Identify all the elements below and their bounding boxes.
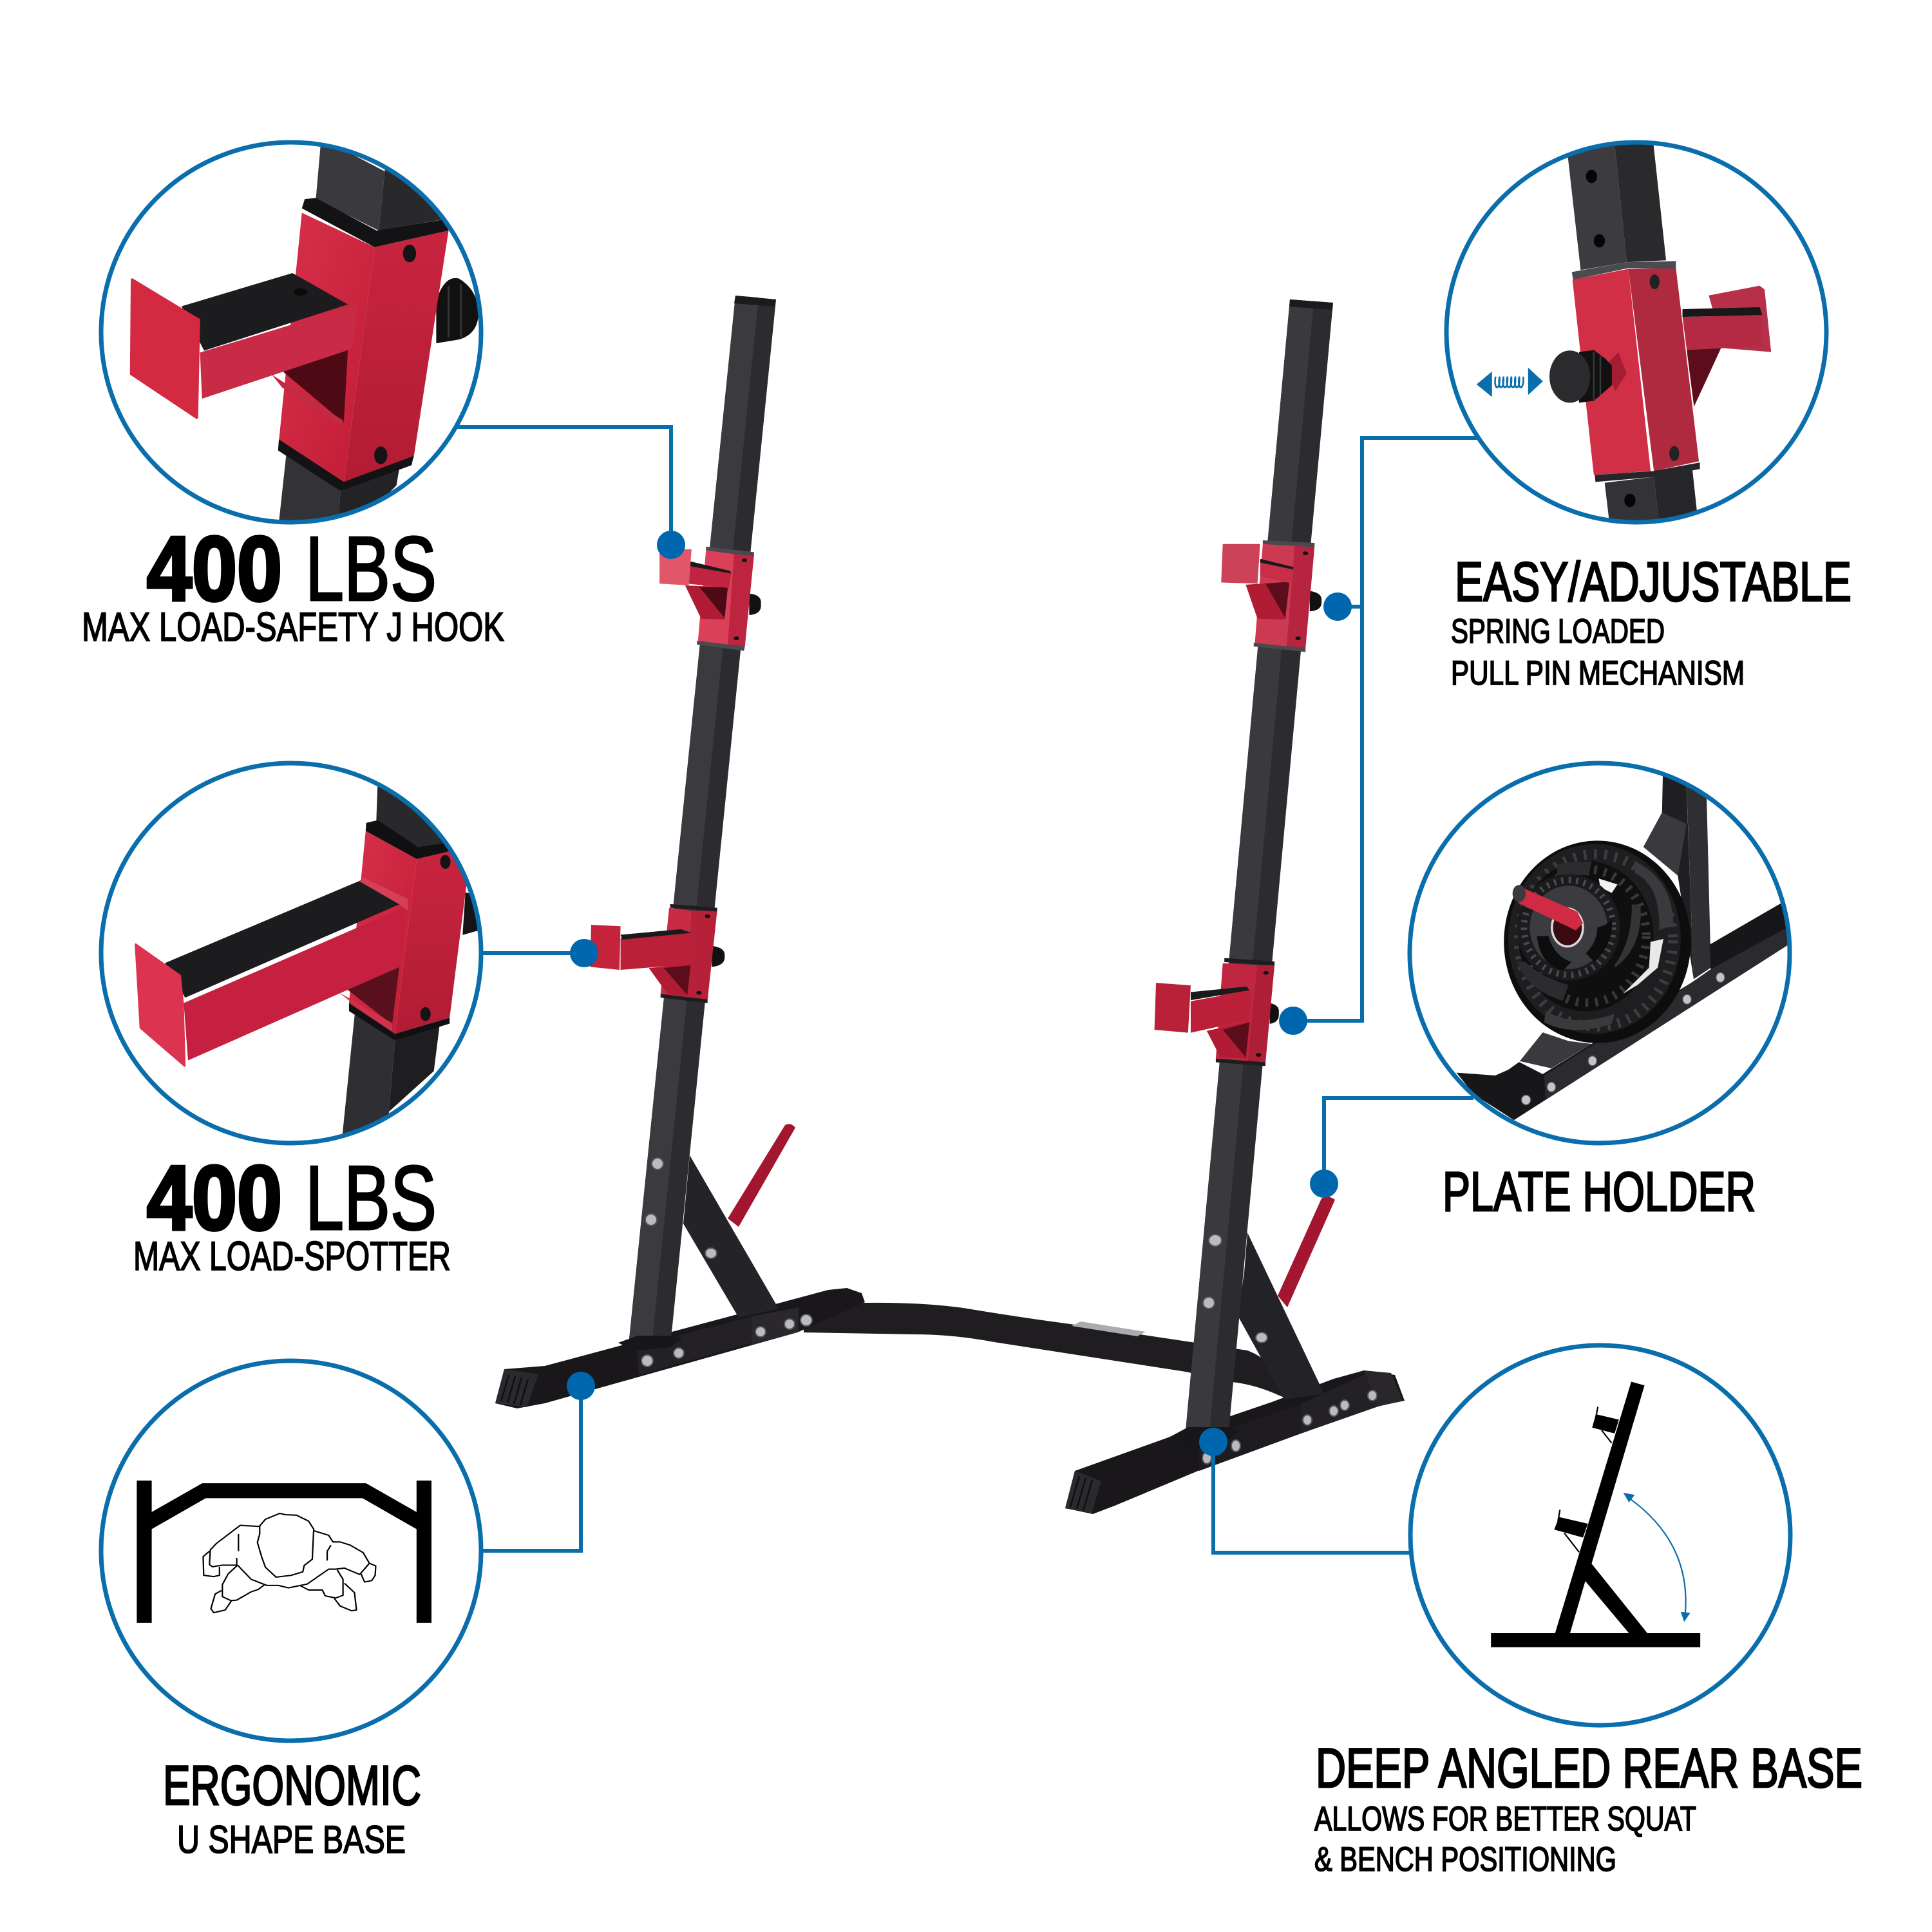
text: spring loaded pull pin mechanism: SPRING LOADED — [1451, 612, 1665, 650]
text: better squat and bench positioning: & BENCH POSITIONING — [1314, 1841, 1616, 1879]
heading: 400 LBS J hook: 400 — [147, 518, 282, 620]
heading: 400 LBS J hook — [147, 518, 437, 620]
panel: pull pin detail — [1446, 139, 1826, 529]
bolts — [1521, 972, 1725, 1105]
heading: 400 LBS spotter: 400 — [147, 1147, 282, 1249]
left base tube — [495, 1288, 865, 1408]
icon: U base with lifter top view — [137, 1481, 431, 1623]
panel: deep angled base icon — [1410, 1345, 1790, 1725]
right plate holder peg — [1278, 1197, 1335, 1307]
left plate holder peg — [728, 1124, 795, 1227]
text: max load spotter: MAX LOAD-SPOTTER — [133, 1234, 451, 1279]
icon: side profile of rack with angle arrow — [1491, 1381, 1700, 1647]
panel: plate holder detail — [1410, 763, 1793, 1143]
text: spring loaded pull pin mechanism — [1451, 612, 1745, 692]
left upright post — [629, 296, 776, 1339]
text: spring loaded pull pin mechanism: PULL PIN MECHANISM — [1451, 654, 1745, 692]
left diagonal brace — [683, 1155, 779, 1318]
left upper J hook — [659, 547, 761, 651]
panel: safety J hook detail — [101, 138, 481, 530]
right diagonal brace — [1238, 1233, 1324, 1399]
pull pin knob — [1549, 350, 1612, 402]
connector lines — [457, 427, 1477, 1553]
heading: 400 LBS spotter: LBS — [305, 1147, 437, 1249]
panel: spotter arm detail — [101, 763, 484, 1143]
icon: spring double arrow — [1477, 368, 1543, 397]
knob — [436, 278, 478, 343]
text: max load safety J hook: MAX LOAD-SAFETY J HOOK — [82, 605, 504, 650]
text: better squat and bench positioning: ALLOWS FOR BETTER SQUAT — [1314, 1800, 1696, 1838]
right upper J hook — [1221, 540, 1321, 652]
heading: 400 LBS spotter — [147, 1147, 437, 1249]
heading: ergonomic: ERGONOMIC — [163, 1755, 421, 1817]
callout dots — [567, 531, 1352, 1456]
right lower spotter arm — [1155, 958, 1279, 1066]
right upright post — [1186, 299, 1333, 1431]
squat rack product photo — [495, 296, 1405, 1514]
left lower spotter arm — [590, 904, 724, 1003]
bolts — [641, 1158, 1377, 1464]
text: better squat and bench positioning — [1314, 1800, 1696, 1879]
right base tube — [1065, 1370, 1405, 1514]
heading: 400 LBS J hook: LBS — [305, 518, 437, 620]
U-shaped cross base — [804, 1303, 1285, 1397]
text: U shape base: U SHAPE BASE — [177, 1818, 406, 1861]
rack hardware in zoom coordinates — [590, 540, 1321, 1066]
heading: plate holder: PLATE HOLDER — [1443, 1161, 1756, 1223]
panel: ergonomic U base icon — [101, 1361, 481, 1741]
